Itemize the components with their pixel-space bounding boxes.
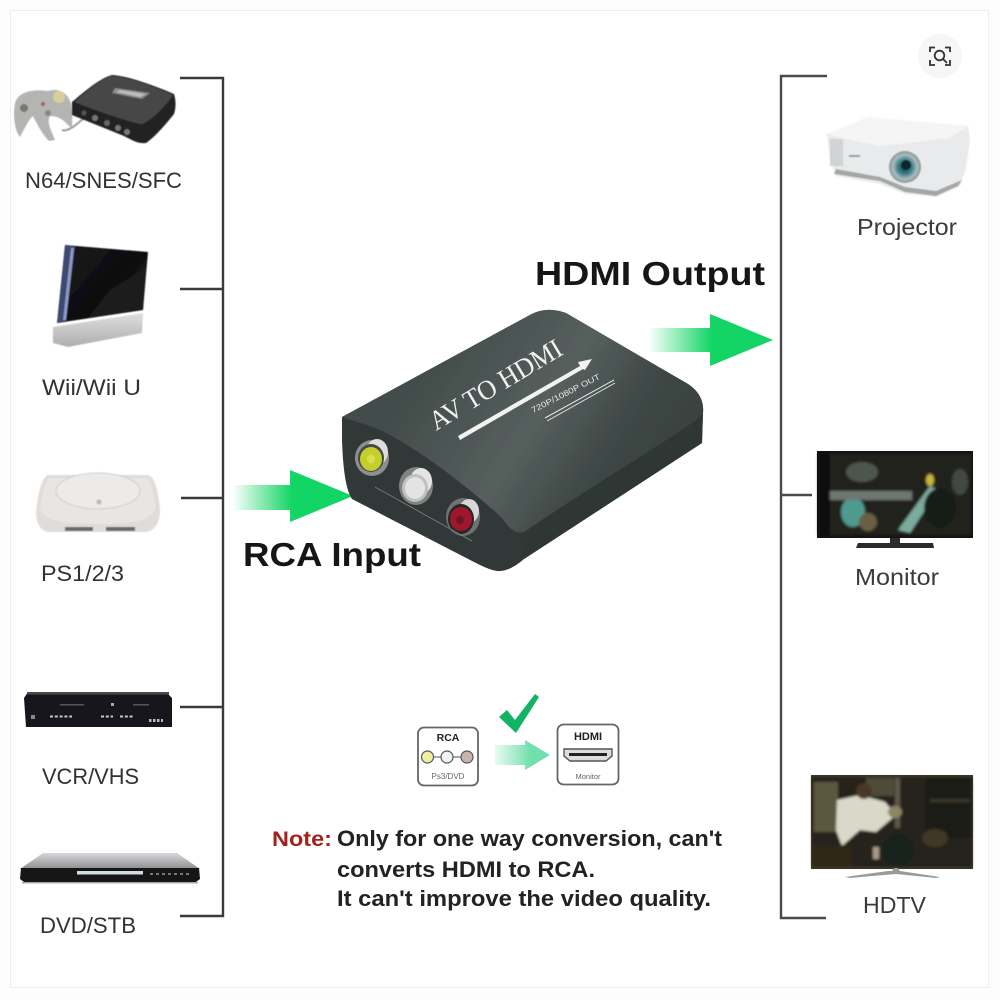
icon: PS1 console — [36, 473, 160, 532]
note label: Note: — [272, 828, 332, 851]
arrow: HDMI output — [650, 314, 773, 366]
monitor screen artwork — [818, 453, 971, 535]
output device: monitor — [817, 451, 973, 590]
note line 1: Only for one way conversion, can't — [337, 826, 723, 851]
source device: Wii — [42, 245, 148, 400]
output device: projector — [827, 117, 970, 240]
converter printed arrow — [458, 359, 592, 440]
label: HDTV: HDTV — [863, 892, 927, 918]
product: AV to HDMI converter — [342, 310, 703, 571]
icon: RCA source box — [418, 728, 478, 786]
heading: RCA Input: RCA Input — [243, 536, 421, 573]
output device: HDTV — [811, 775, 973, 918]
icon: HDMI target box: Monitor — [575, 772, 601, 781]
left bracket connector — [180, 78, 223, 916]
note text block — [272, 826, 723, 911]
icon: projector — [827, 117, 970, 197]
right bracket connector — [781, 76, 827, 918]
converter resolution text — [530, 372, 615, 421]
converter top face — [342, 310, 703, 532]
icon: image search button — [918, 34, 962, 78]
icon: monitor — [817, 451, 973, 548]
note line 2: converts HDMI to RCA. — [337, 857, 595, 882]
arrow: RCA input — [232, 470, 353, 522]
converter front trace line — [375, 487, 472, 541]
RCA jack: red — [446, 498, 480, 536]
label: PS1/2/3: PS1/2/3 — [41, 561, 124, 586]
source device: PlayStation — [36, 473, 160, 586]
heading: HDMI Output: HDMI Output — [535, 255, 765, 292]
label: VCR/VHS: VCR/VHS — [42, 764, 139, 789]
icon: HDMI target box — [558, 724, 618, 784]
converter body — [342, 310, 703, 571]
HDTV body — [811, 775, 973, 869]
icon: N64 console — [72, 75, 176, 143]
icon: HDTV — [811, 775, 973, 878]
RCA jack: white — [399, 467, 433, 505]
label: DVD/STB: DVD/STB — [40, 913, 136, 938]
label: Projector: Projector — [857, 214, 957, 240]
icon: green check — [499, 694, 539, 733]
label: Monitor: Monitor — [855, 564, 939, 590]
monitor body — [817, 451, 973, 538]
monitor stand — [856, 538, 934, 548]
icon: DVD player — [20, 853, 200, 884]
RCA jack: yellow — [355, 439, 389, 476]
icon: N64 controller — [14, 90, 84, 141]
icon: VCR player — [24, 692, 172, 727]
converter title: AV TO HDMI — [424, 334, 568, 437]
source device: N64 — [14, 75, 182, 193]
icon: HDMI target box: HDMI — [574, 731, 602, 743]
HDTV stand — [845, 868, 940, 878]
icon: RCA source box: Ps3/DVD — [432, 772, 465, 781]
label: Wii/Wii U: Wii/Wii U — [42, 375, 141, 400]
note line 3: It can't improve the video quality. — [337, 886, 711, 911]
arrow: one way — [495, 740, 550, 770]
converter side band — [520, 412, 703, 559]
source device: DVD — [20, 853, 200, 938]
HDTV screen artwork — [812, 777, 972, 867]
label: N64/SNES/SFC: N64/SNES/SFC — [25, 168, 182, 193]
icon: Wii console — [53, 245, 148, 347]
diagram: one-way RCA to HDMI — [418, 694, 618, 786]
icon: RCA source box: RCA — [437, 732, 460, 744]
source device: VCR — [24, 692, 172, 789]
converter resolution text: 720P/1080P OUT — [530, 372, 602, 415]
